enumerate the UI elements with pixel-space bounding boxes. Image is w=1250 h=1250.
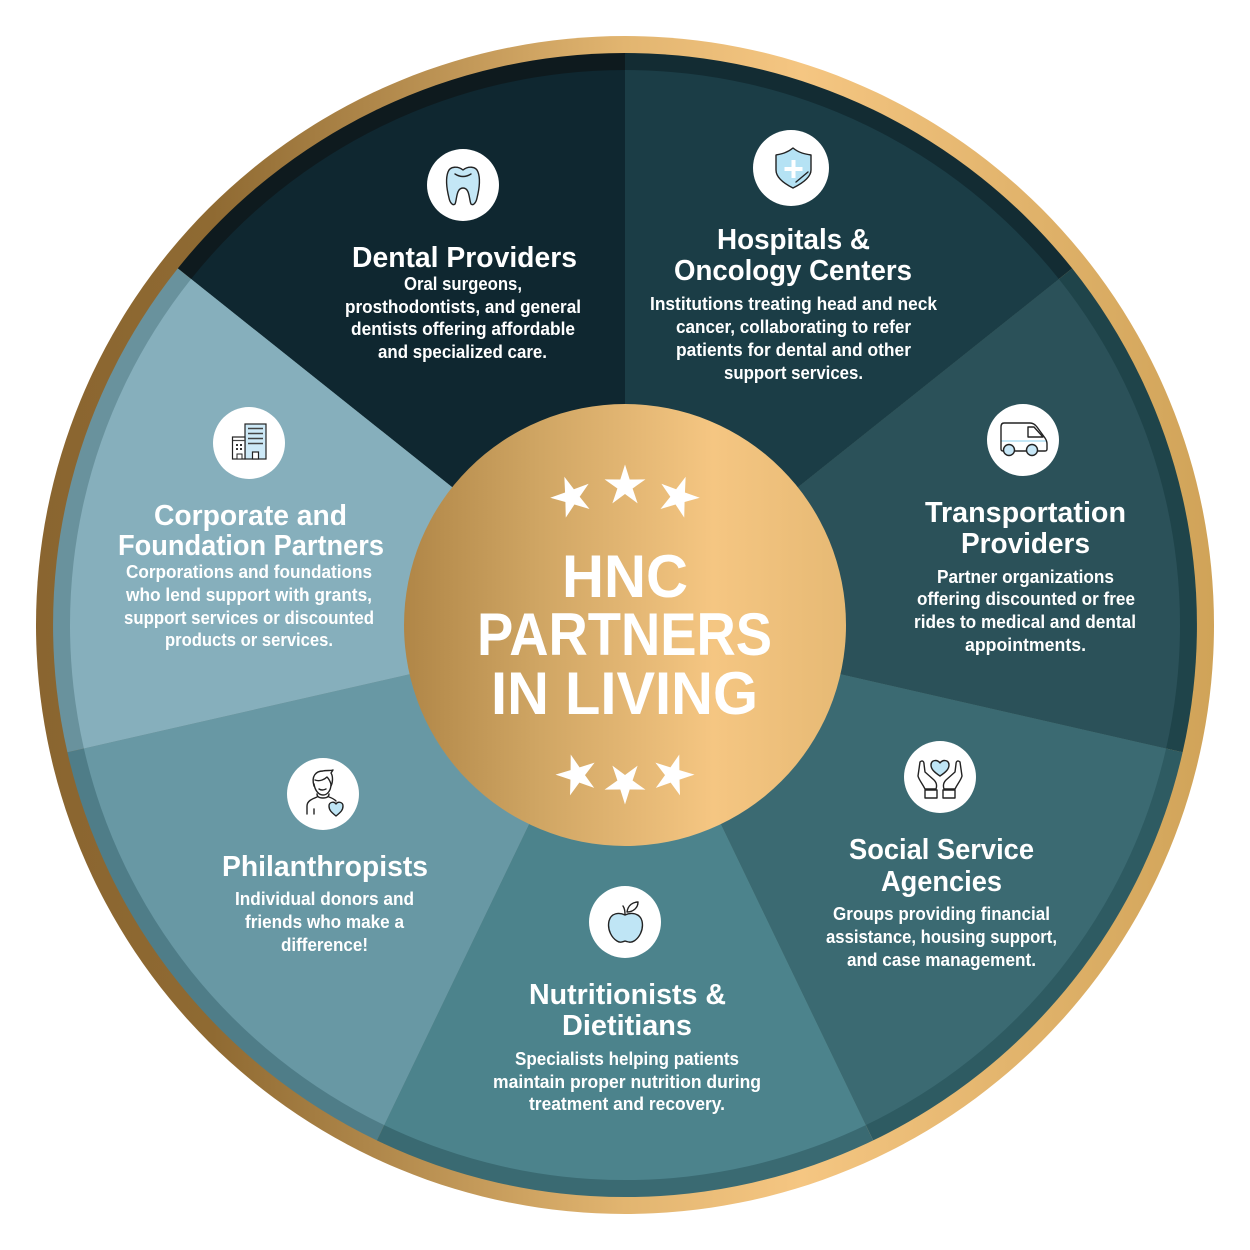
icon: buildings bbox=[213, 407, 285, 479]
panel: transportation providers bbox=[625, 268, 1197, 752]
text: dental providers description: dentists offering affordable bbox=[351, 319, 575, 339]
text: social service description: assistance, housing support, bbox=[826, 927, 1057, 947]
panel: nutritionists and dietitians bbox=[377, 625, 873, 1197]
wedge: social service bbox=[625, 625, 1183, 1140]
text: corporate description: Corporations and foundations bbox=[126, 562, 372, 582]
text: corporate description: products or services. bbox=[165, 630, 333, 650]
text: social service description: and case management. bbox=[847, 950, 1036, 970]
wedge: dental providers bbox=[178, 53, 625, 625]
text: corporate description: support services or discounted bbox=[124, 608, 374, 628]
icon: person with heart bbox=[287, 758, 359, 830]
heading: corporate and foundation partners bbox=[118, 500, 384, 562]
center gold circle bbox=[404, 404, 846, 846]
center title: PARTNERS bbox=[477, 601, 772, 668]
heading: dental providers: Dental Providers bbox=[352, 242, 577, 274]
icon: van bbox=[987, 404, 1059, 476]
text: nutrition description: maintain proper nutrition during bbox=[493, 1072, 761, 1092]
text: corporate description: who lend support with grants, bbox=[125, 585, 372, 605]
heading: nutritionists and dietitians: Dietitians bbox=[562, 1010, 692, 1042]
text: philanthropists description: difference! bbox=[281, 935, 368, 955]
text: nutrition description bbox=[493, 1049, 761, 1114]
heading: hospitals and oncology centers bbox=[674, 224, 912, 287]
icon: hands holding heart bbox=[904, 741, 976, 813]
heading: transportation providers: Providers bbox=[961, 528, 1090, 560]
center medallion bbox=[404, 404, 846, 846]
text: transportation description: rides to medical and dental bbox=[914, 612, 1136, 632]
heading: social service agencies: Agencies bbox=[881, 866, 1002, 898]
text: transportation description: offering discounted or free bbox=[917, 589, 1135, 609]
heading: nutritionists and dietitians: Nutritionists & bbox=[529, 979, 726, 1011]
text: transportation description: Partner organizations bbox=[937, 567, 1114, 587]
text: transportation description: appointments. bbox=[965, 635, 1086, 655]
text: philanthropists description: Individual donors and bbox=[235, 889, 414, 909]
icon: tooth bbox=[427, 149, 499, 221]
text: nutrition description: treatment and recovery. bbox=[529, 1094, 725, 1114]
center title bbox=[477, 543, 772, 727]
center title: IN LIVING bbox=[491, 660, 758, 727]
heading: social service agencies: Social Service bbox=[849, 834, 1034, 866]
heading: transportation providers: Transportation bbox=[925, 497, 1126, 529]
heading: hospitals and oncology centers: Oncology Centers bbox=[674, 255, 912, 287]
text: corporate description bbox=[124, 562, 374, 650]
text: hospitals description bbox=[650, 294, 938, 383]
panel: dental providers bbox=[178, 53, 625, 625]
panel: corporate and foundation partners bbox=[53, 268, 625, 752]
text: social service description bbox=[826, 904, 1057, 970]
wedge: philanthropists bbox=[67, 625, 625, 1140]
text: philanthropists description bbox=[235, 889, 414, 955]
text: nutrition description: Specialists helping patients bbox=[515, 1049, 739, 1069]
text: hospitals description: support services. bbox=[724, 363, 863, 383]
wedge: transportation bbox=[625, 268, 1197, 752]
text: transportation description bbox=[914, 567, 1136, 655]
heading: nutritionists and dietitians bbox=[529, 979, 726, 1042]
heading: philanthropists: Philanthropists bbox=[222, 851, 428, 883]
panel: hospitals and oncology centers bbox=[625, 53, 1072, 625]
heading: hospitals and oncology centers: Hospitals & bbox=[717, 224, 870, 256]
text: dental providers description bbox=[345, 274, 581, 362]
panel: social service agencies bbox=[625, 625, 1183, 1140]
text: dental providers description: and specialized care. bbox=[378, 342, 547, 362]
wedge: hospitals bbox=[625, 53, 1072, 625]
text: hospitals description: patients for dental and other bbox=[676, 340, 911, 360]
text: dental providers description: Oral surgeons, bbox=[404, 274, 522, 294]
text: philanthropists description: friends who make a bbox=[245, 912, 405, 932]
center title: HNC bbox=[562, 543, 688, 610]
heading: social service agencies bbox=[849, 834, 1034, 898]
panel: philanthropists bbox=[67, 625, 625, 1140]
text: social service description: Groups providing financial bbox=[833, 904, 1050, 924]
wedge: nutrition bbox=[377, 625, 873, 1197]
stars: bottom row bbox=[551, 748, 699, 804]
text: hospitals description: Institutions treating head and neck bbox=[650, 294, 938, 314]
heading: corporate and foundation partners: Foundation Partners bbox=[118, 530, 384, 562]
stars: top row bbox=[545, 464, 705, 520]
text: hospitals description: cancer, collaborating to refer bbox=[676, 317, 911, 337]
icon: shield bbox=[753, 130, 829, 206]
text: dental providers description: prosthodontists, and general bbox=[345, 297, 581, 317]
heading: corporate and foundation partners: Corporate and bbox=[154, 500, 347, 532]
wedge: corporate bbox=[53, 268, 625, 752]
heading: transportation providers bbox=[925, 497, 1126, 560]
icon: apple bbox=[589, 886, 661, 958]
